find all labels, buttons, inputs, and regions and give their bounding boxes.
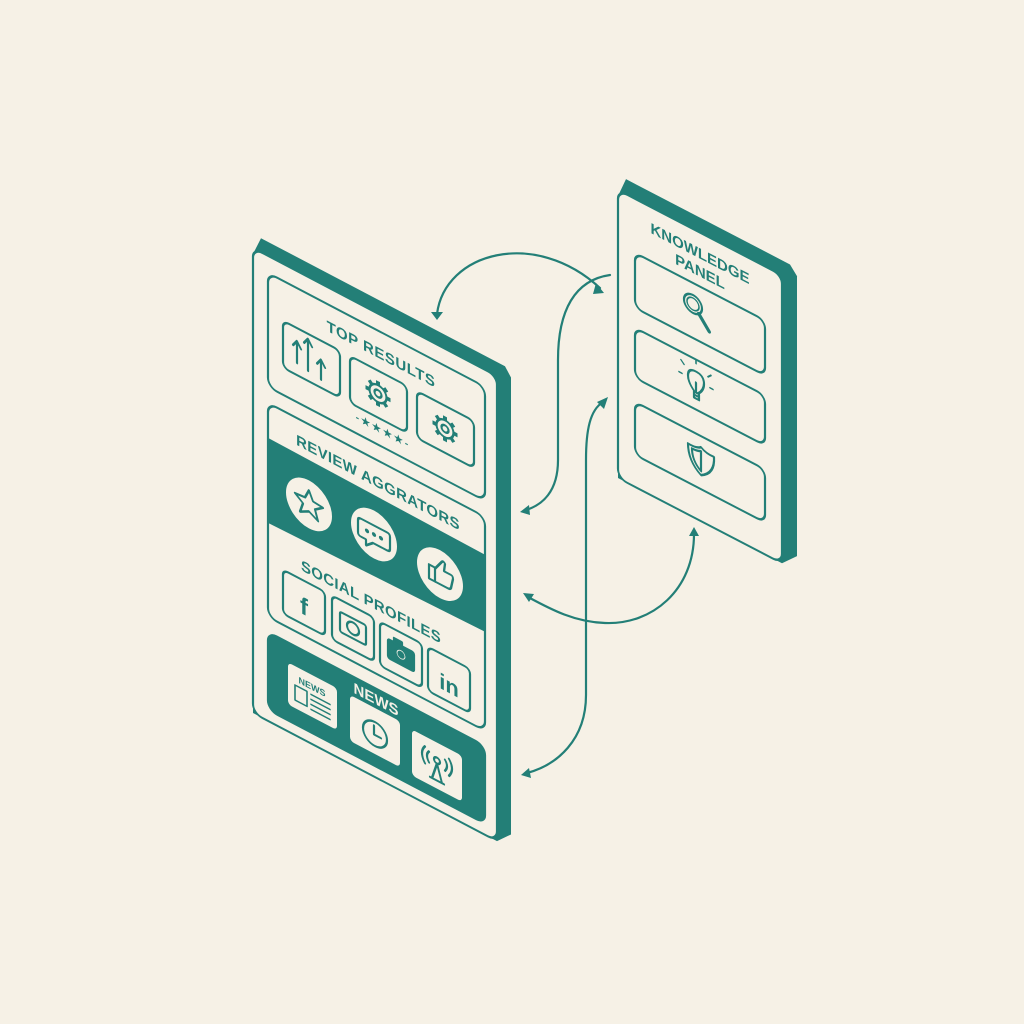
section: top results: TOP RESULTS [327,318,435,392]
arrow: knowledge panel to review [520,275,610,515]
icon: camera 2 [380,622,422,688]
dark band [268,438,485,637]
icon: newspaper [288,662,337,730]
box: idea [635,328,765,445]
arrow: top results to knowledge panel [431,253,604,320]
section: top results [268,273,485,501]
section: review aggregators and social profiles: SOCIAL PROFILES [301,558,441,647]
icon: thumbs up [417,538,463,610]
icon: linkedin [428,647,470,713]
icon: camera 1 [332,595,374,662]
icon: facebook [283,570,325,636]
section: news [268,632,485,824]
box: shield [635,402,765,522]
icon: growth arrows [283,321,340,398]
icon: chat bubble [351,498,397,571]
box: search [635,253,765,375]
icon: newspaper: NEWS [299,675,326,700]
title: KNOWLEDGE [650,221,750,288]
section: review aggregators and social profiles [268,403,485,731]
section: review aggregators and social profiles: REVIEW AGGRATORS [296,432,460,534]
panel: knowledge panel: PANEL [675,252,725,293]
icon: facebook: f [300,592,308,623]
rating stars: -★★★★- [356,412,410,451]
section: news: NEWS [354,681,399,720]
panel: search results device [253,234,511,848]
icon: linkedin: in [439,668,459,703]
icon: star [286,468,332,540]
icon: gear [350,356,407,433]
arrows: connections [431,253,699,778]
panel: knowledge panel [618,175,797,571]
icon: clock [350,695,400,767]
icon: broadcast tower [412,729,462,802]
arrow: news to knowledge panel [521,397,608,778]
arrow: social to knowledge panel [523,527,699,623]
icon: gear small [417,391,474,468]
